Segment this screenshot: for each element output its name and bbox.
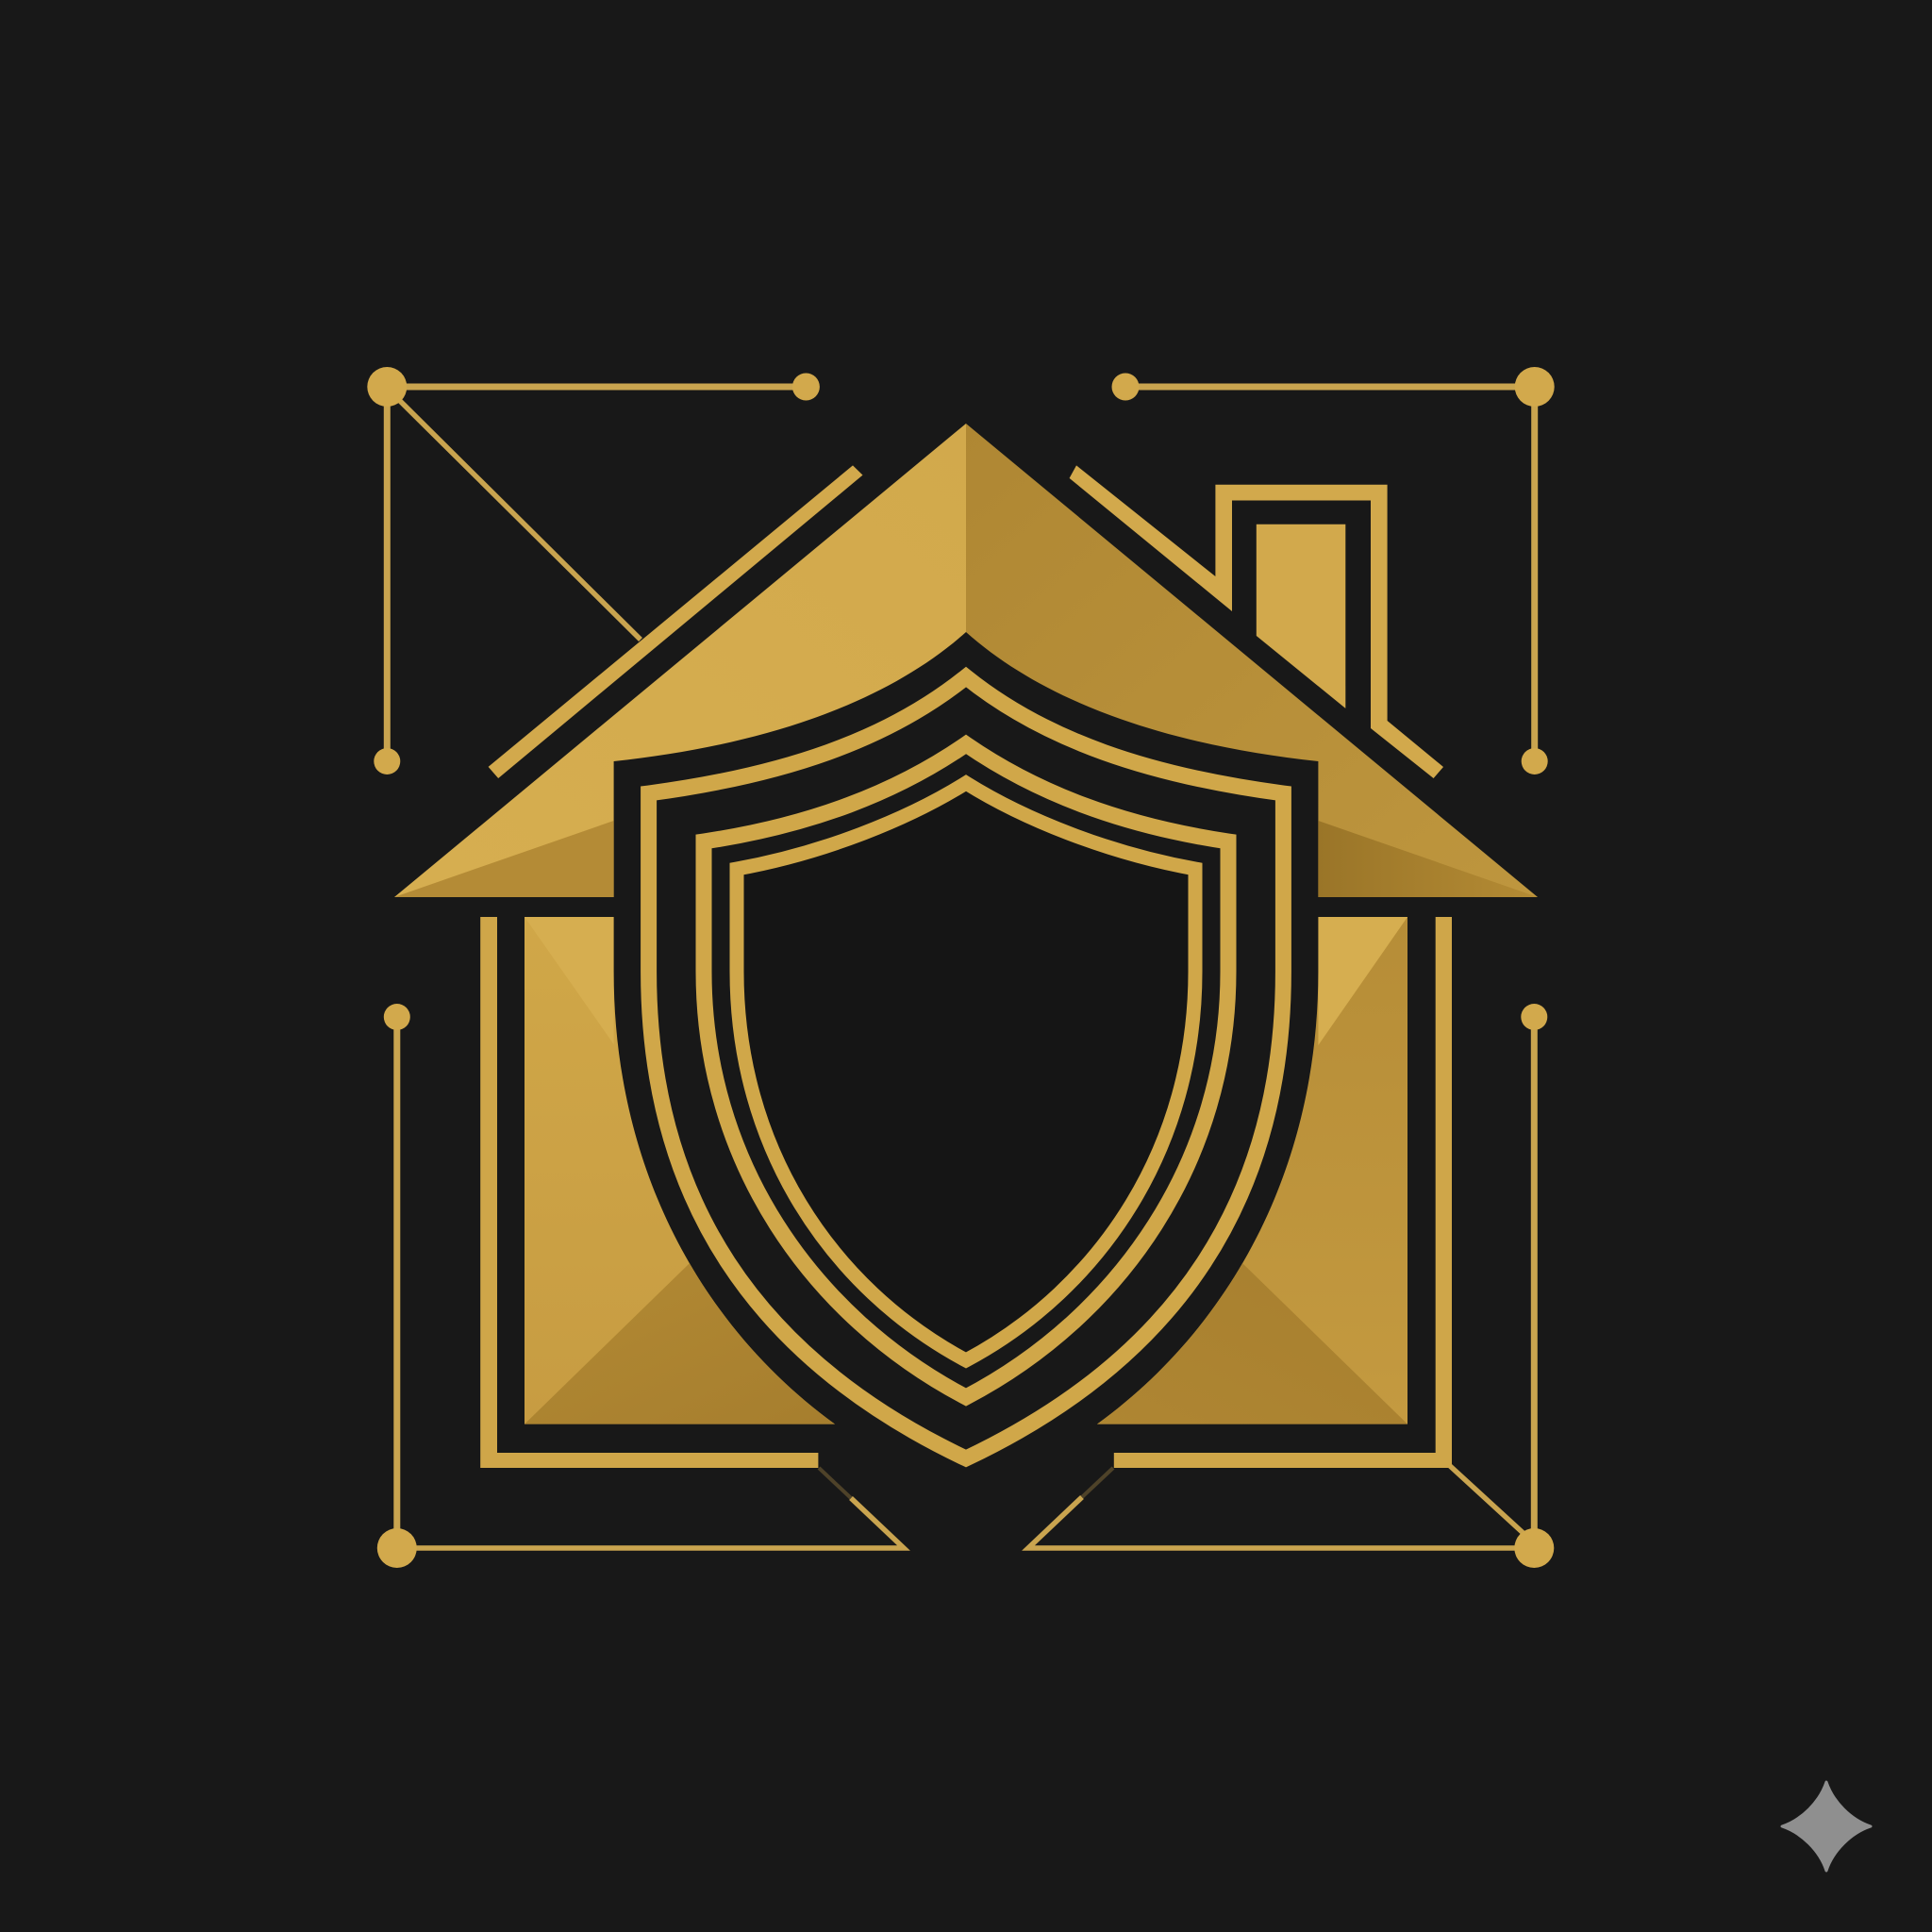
wall outline: right — [1114, 917, 1452, 1468]
shield: inner ring — [737, 783, 1195, 1360]
shield: middle ring — [704, 744, 1228, 1397]
connector lines: top right bracket — [1111, 367, 1555, 774]
roof: left face — [394, 424, 966, 897]
roof outline and chimney frame: right — [1070, 465, 1443, 778]
roof outline strip: left — [489, 465, 862, 778]
wall outline: left — [480, 917, 818, 1468]
chimney — [1257, 525, 1345, 708]
roof: right face — [966, 424, 1538, 897]
emblem artwork — [367, 367, 1872, 1872]
connector lines: bottom left bracket — [377, 1004, 904, 1568]
shield: outer ring — [649, 677, 1283, 1458]
connector lines: bottom right bracket — [1028, 1004, 1554, 1568]
wall panel: right — [1097, 917, 1407, 1424]
icon: four-point sparkle watermark — [1782, 1782, 1871, 1871]
connector lines: top left bracket — [367, 367, 820, 774]
wall panel: left — [525, 917, 835, 1424]
